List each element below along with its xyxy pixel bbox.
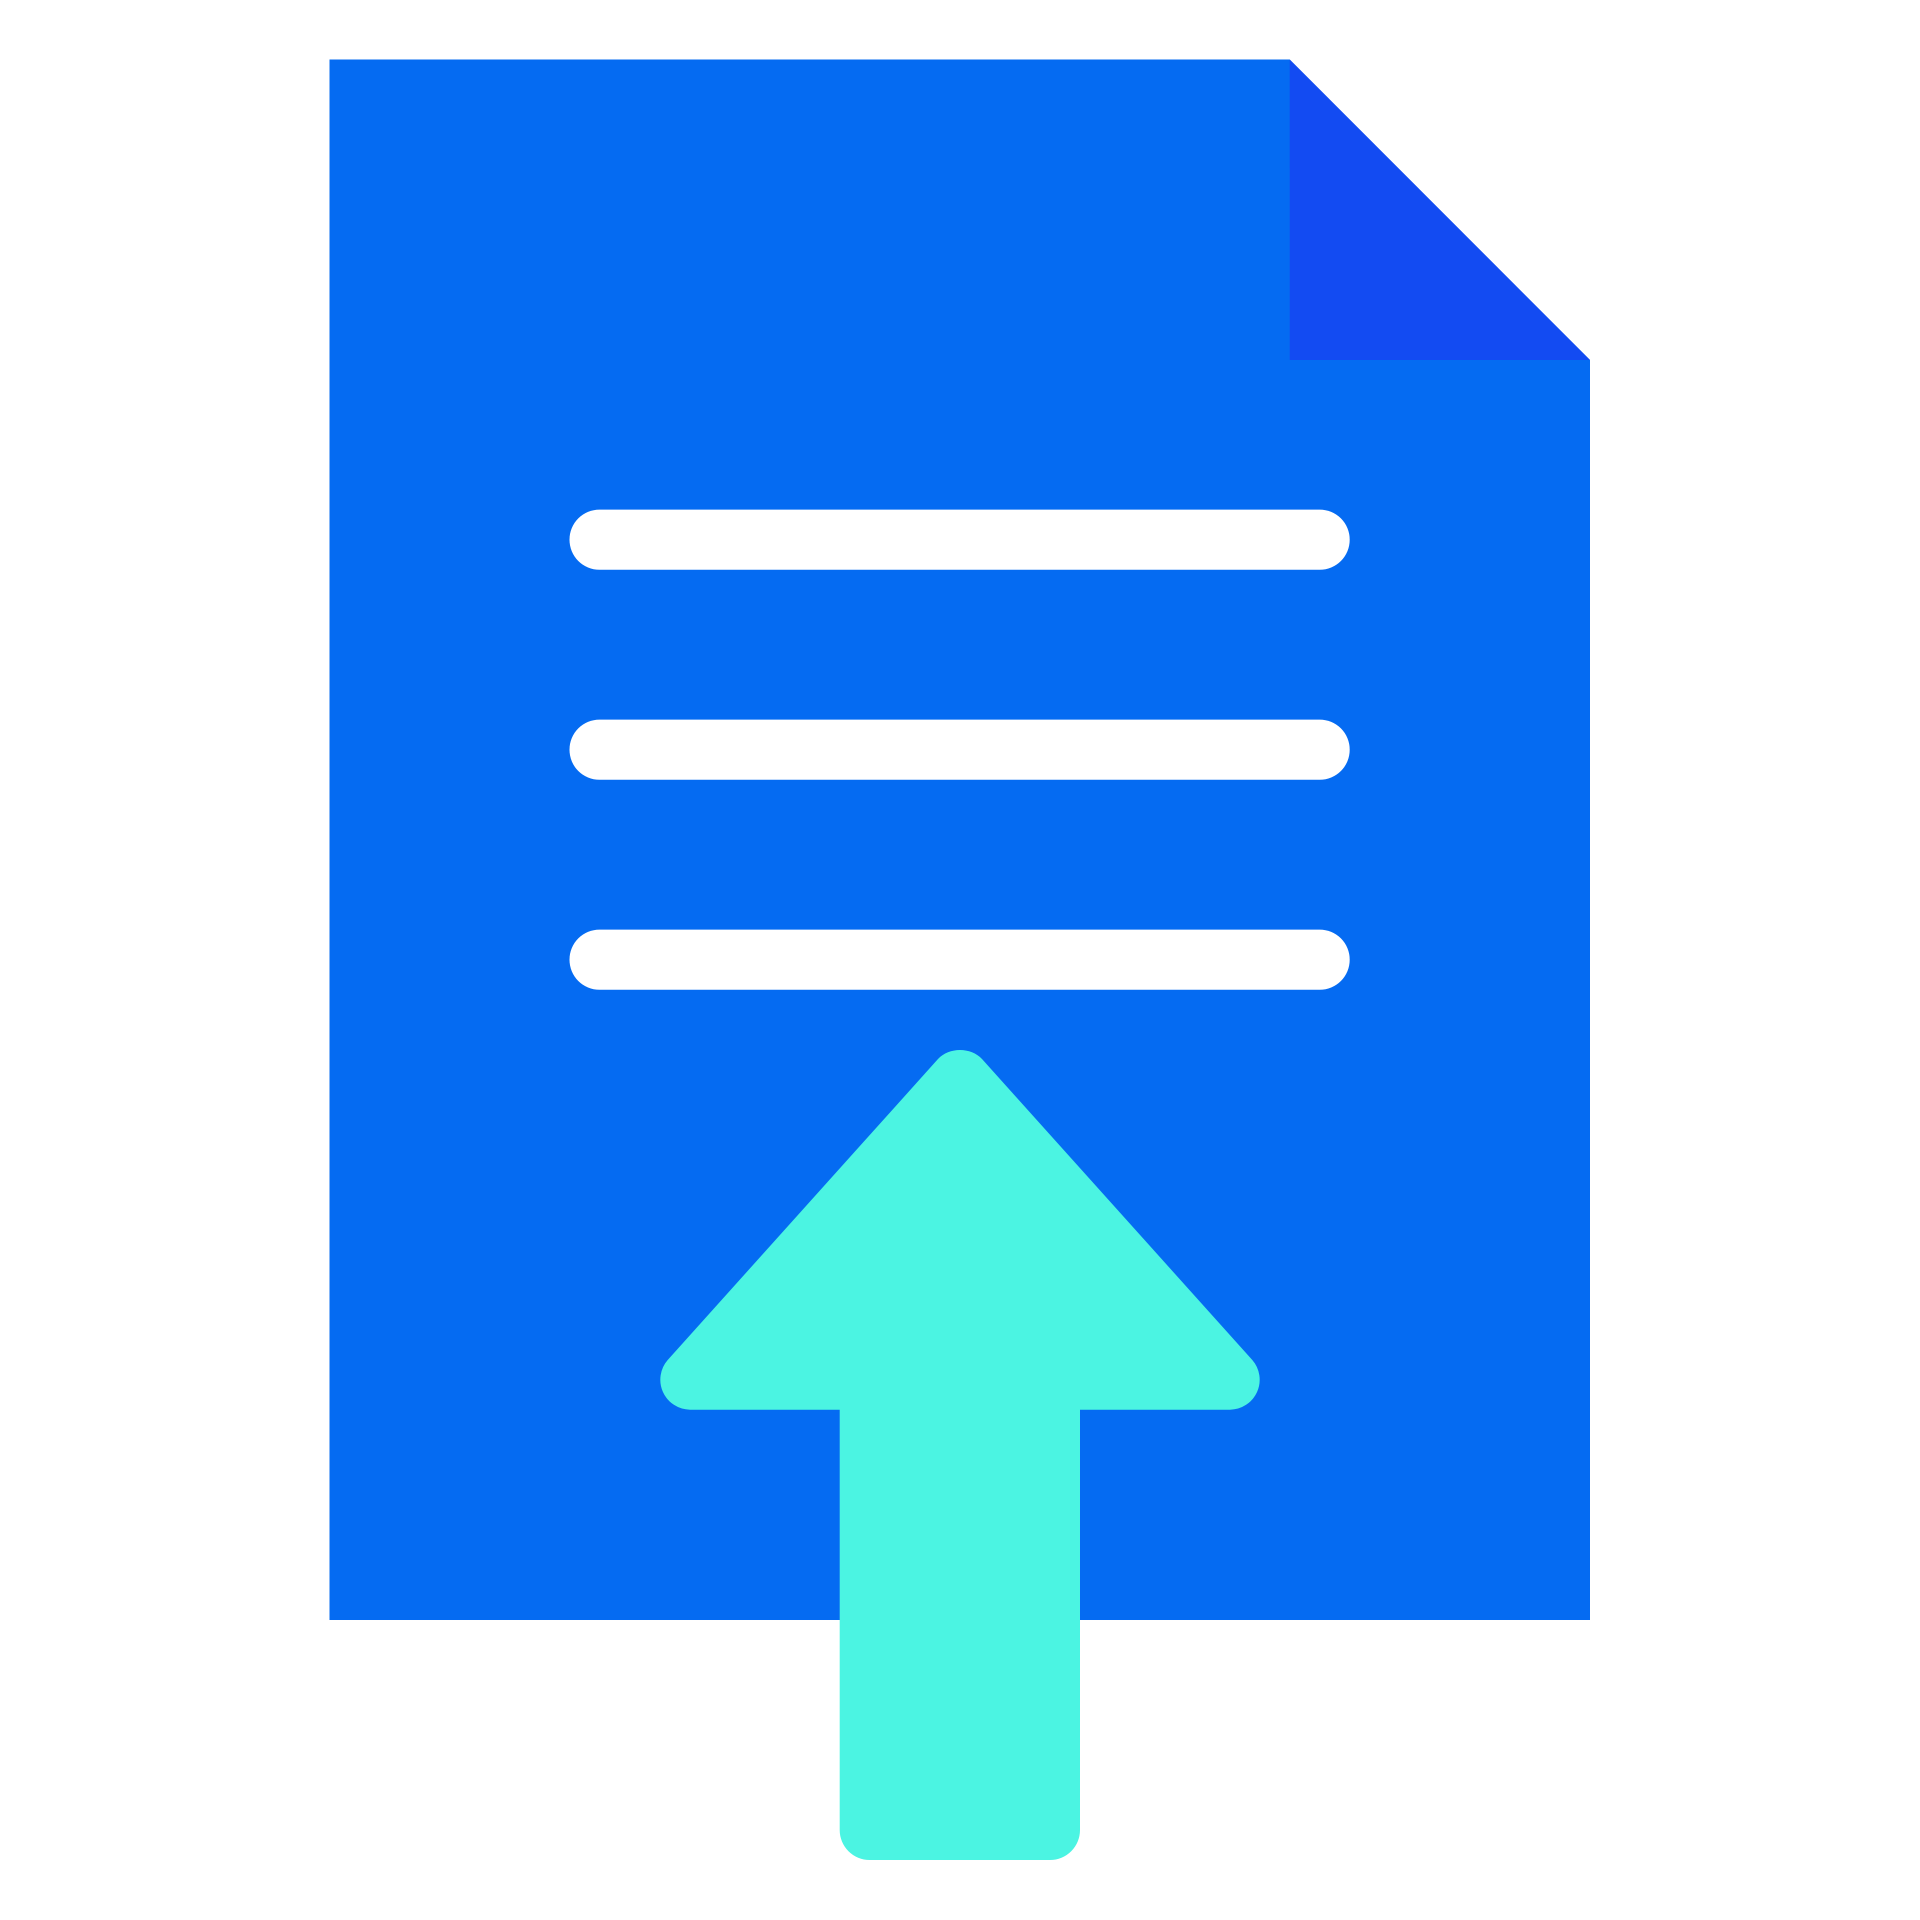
- text lines: [570, 510, 1350, 990]
- arrow: upload: [660, 1050, 1260, 1860]
- document body: [330, 60, 1590, 1620]
- folded corner: [1290, 60, 1590, 360]
